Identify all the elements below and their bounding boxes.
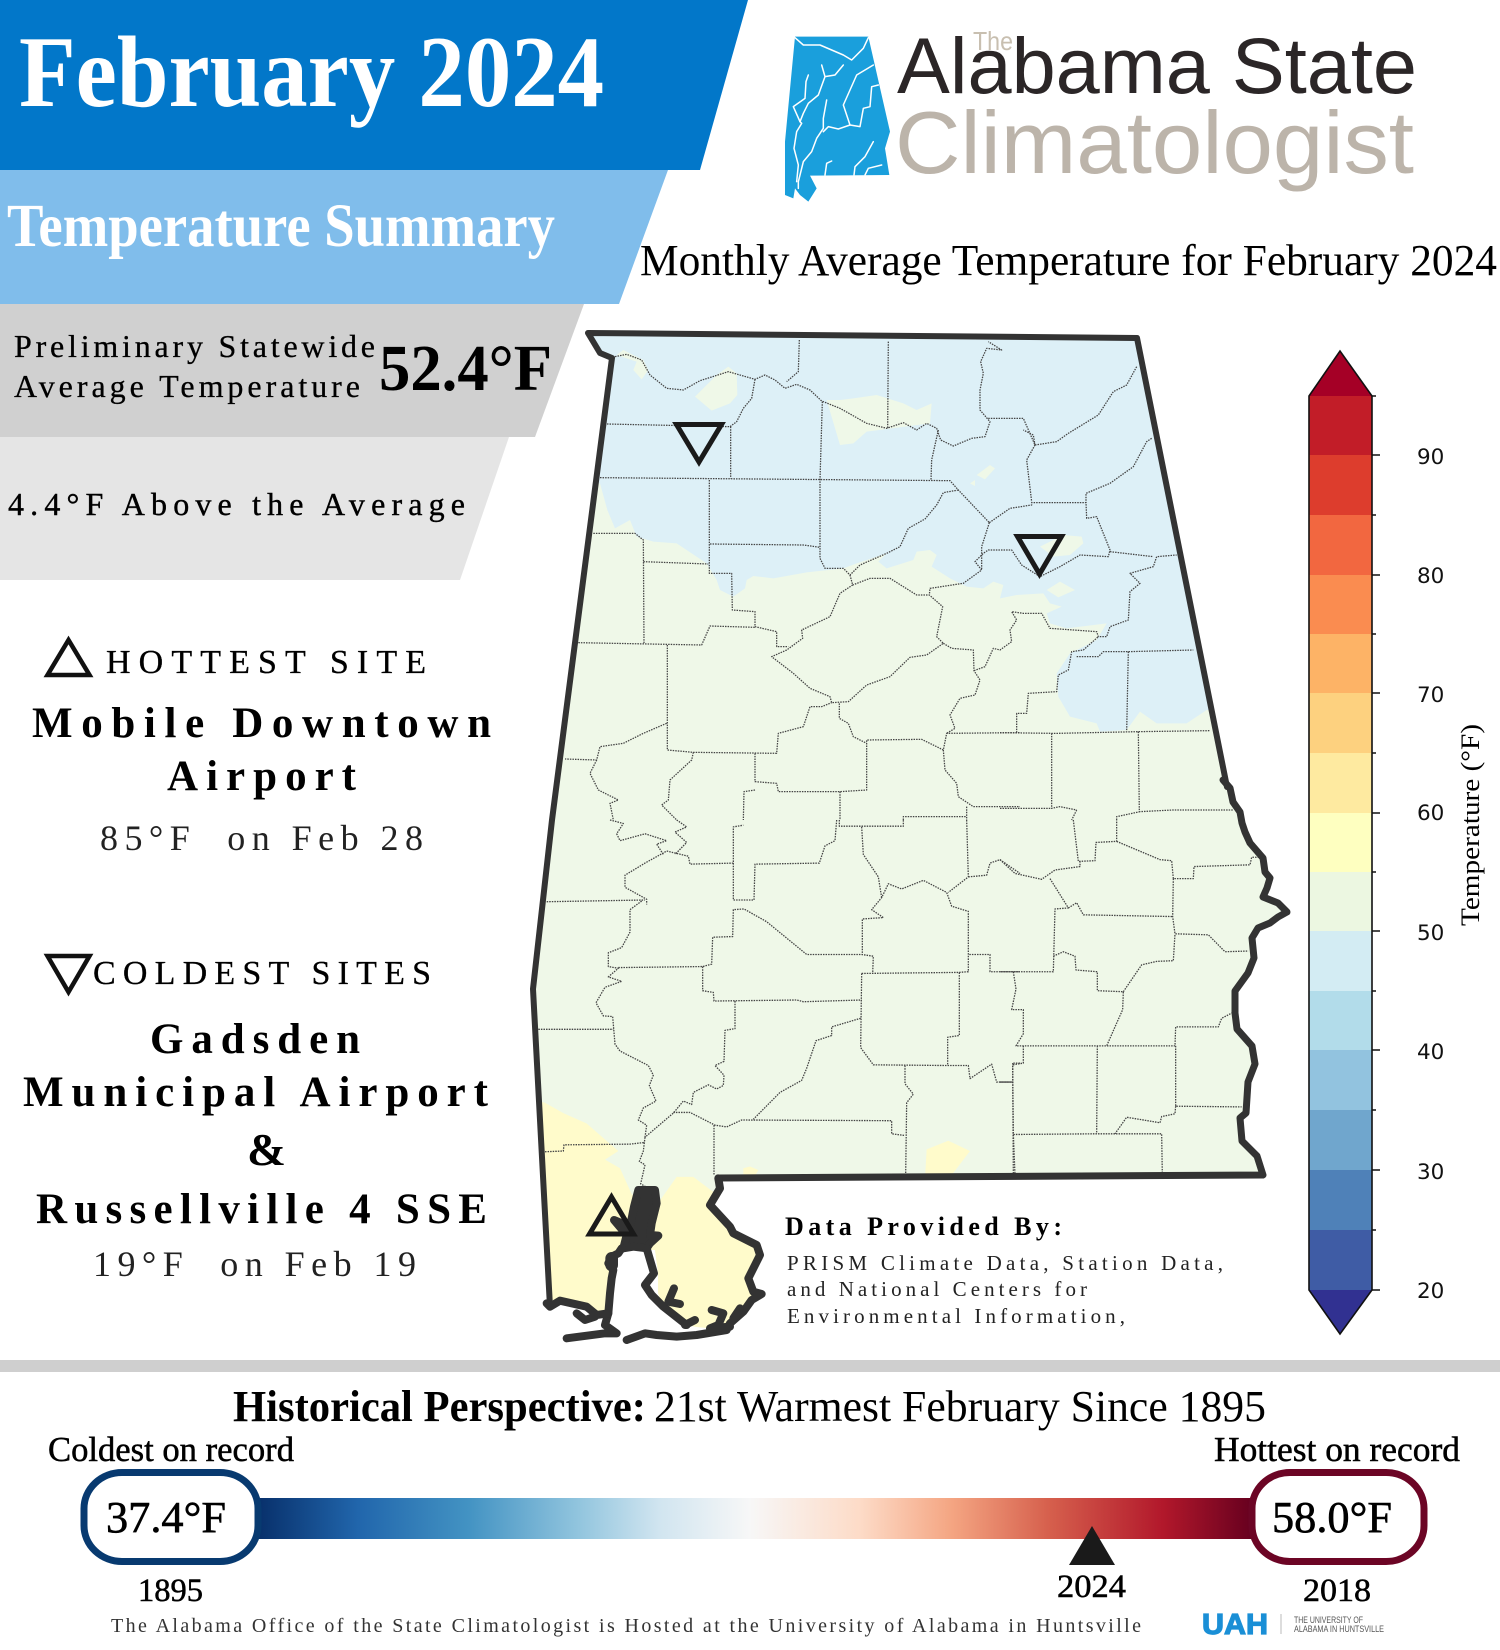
- map: Alabama average temperature: [500, 320, 1300, 1350]
- marker: coldest site Gadsden: [1018, 536, 1062, 574]
- text: preliminary statewide label: Preliminary Statewide: [14, 328, 375, 364]
- legend labels: 70: [1417, 683, 1444, 708]
- icon: hottest triangle: [48, 640, 90, 675]
- credit line one: PRISM Climate Data, Station Data,: [787, 1251, 1223, 1275]
- anomaly text: 4.4°F Above the Average: [8, 486, 465, 522]
- pill: coldest value: 37.4°F: [106, 1493, 226, 1542]
- logo word: The: The: [973, 26, 1013, 56]
- icon: Alabama state shape with rivers: [785, 37, 890, 202]
- panel: coldest sites: [23, 955, 489, 1284]
- coldest value and date: 19°F on Feb 19: [93, 1244, 416, 1284]
- site name line two: Airport: [167, 753, 357, 800]
- heading: data provided by: Data Provided By:: [785, 1212, 1062, 1241]
- gradient scale bar: [258, 1498, 1252, 1539]
- credit line three: Environmental Information,: [787, 1304, 1125, 1328]
- map: county lines: [538, 340, 1262, 1187]
- divider bar: [0, 1360, 1500, 1372]
- legend labels: 30: [1417, 1160, 1444, 1185]
- legend labels: [1417, 445, 1444, 1304]
- logo: Alabama State Climatologist: [785, 21, 1417, 202]
- logo: UAH: ALABAMA IN HUNTSVILLE: [1294, 1624, 1384, 1635]
- panel: anomaly: [0, 437, 509, 580]
- site name municipal airport: Municipal Airport: [23, 1069, 489, 1116]
- legend labels: 80: [1417, 564, 1444, 589]
- legend axis title: Temperature (°F): [1456, 724, 1485, 926]
- icon: coldest triangle: [48, 956, 90, 992]
- colour bar legend: [1309, 351, 1485, 1334]
- marker: 2024 position: [1069, 1526, 1115, 1565]
- marker: coldest site Russellville: [676, 424, 722, 462]
- panel: historical perspective: [48, 1382, 1461, 1609]
- panel: statewide average: [0, 304, 584, 437]
- heading: hottest site: HOTTEST SITE: [106, 644, 426, 681]
- heading: historical perspective: Historical Perspective:: [233, 1382, 646, 1431]
- legend labels: 50: [1417, 921, 1444, 946]
- map: state outline and coast: [533, 333, 1287, 1340]
- legend labels: 20: [1417, 1279, 1444, 1304]
- subtitle: Temperature Summary: [7, 193, 555, 260]
- data credit: [785, 1212, 1223, 1328]
- statewide value: 52.4°F: [379, 332, 552, 405]
- logo: UAH: THE UNIVERSITY OF: [1294, 1615, 1363, 1626]
- logo word: Alabama State: Alabama State: [897, 21, 1417, 110]
- label: coldest on record: Coldest on record: [48, 1430, 294, 1469]
- credit line two: and National Centers for: [787, 1277, 1087, 1301]
- marker: hottest site Mobile: [590, 1197, 634, 1234]
- map fill: temperature zones: [536, 336, 1281, 1328]
- ampersand: &: [247, 1124, 286, 1175]
- logo: UAH: [1202, 1609, 1384, 1641]
- title: February 2024: [19, 16, 604, 129]
- site name: Mobile Downtown: [32, 700, 491, 747]
- legend labels: 40: [1417, 1040, 1444, 1065]
- pill: coldest value: [84, 1472, 258, 1562]
- pill: hottest value: 58.0°F: [1272, 1493, 1392, 1542]
- pill: hottest value: [1252, 1472, 1424, 1562]
- site name gadsden: Gadsden: [150, 1016, 360, 1063]
- map title: Monthly Average Temperature for February 2024: [640, 236, 1497, 285]
- footer credit: The Alabama Office of the State Climatologist is Hosted at the University of Alabama in Huntsville: [111, 1615, 1141, 1637]
- logo word: Climatologist: Climatologist: [895, 93, 1414, 192]
- legend labels: 90: [1417, 445, 1444, 470]
- label: 1895: 1895: [138, 1573, 203, 1609]
- heading: coldest sites: COLDEST SITES: [93, 955, 431, 992]
- label: 2018: 2018: [1303, 1573, 1371, 1609]
- panel: title banner: [0, 0, 748, 170]
- panel: hottest site: [32, 640, 491, 858]
- label: 2024: 2024: [1057, 1569, 1126, 1605]
- label: hottest on record: Hottest on record: [1214, 1430, 1461, 1469]
- text: average temperature label: Average Temperature: [14, 368, 360, 404]
- text: rank: 21st Warmest February Since 1895: [654, 1382, 1266, 1431]
- legend labels: 60: [1417, 801, 1444, 826]
- logo: UAH: UAH: [1202, 1609, 1268, 1641]
- panel: subtitle banner: [0, 170, 668, 304]
- site name russellville: Russellville 4 SSE: [36, 1186, 487, 1233]
- hottest value and date: 85°F on Feb 28: [100, 818, 423, 858]
